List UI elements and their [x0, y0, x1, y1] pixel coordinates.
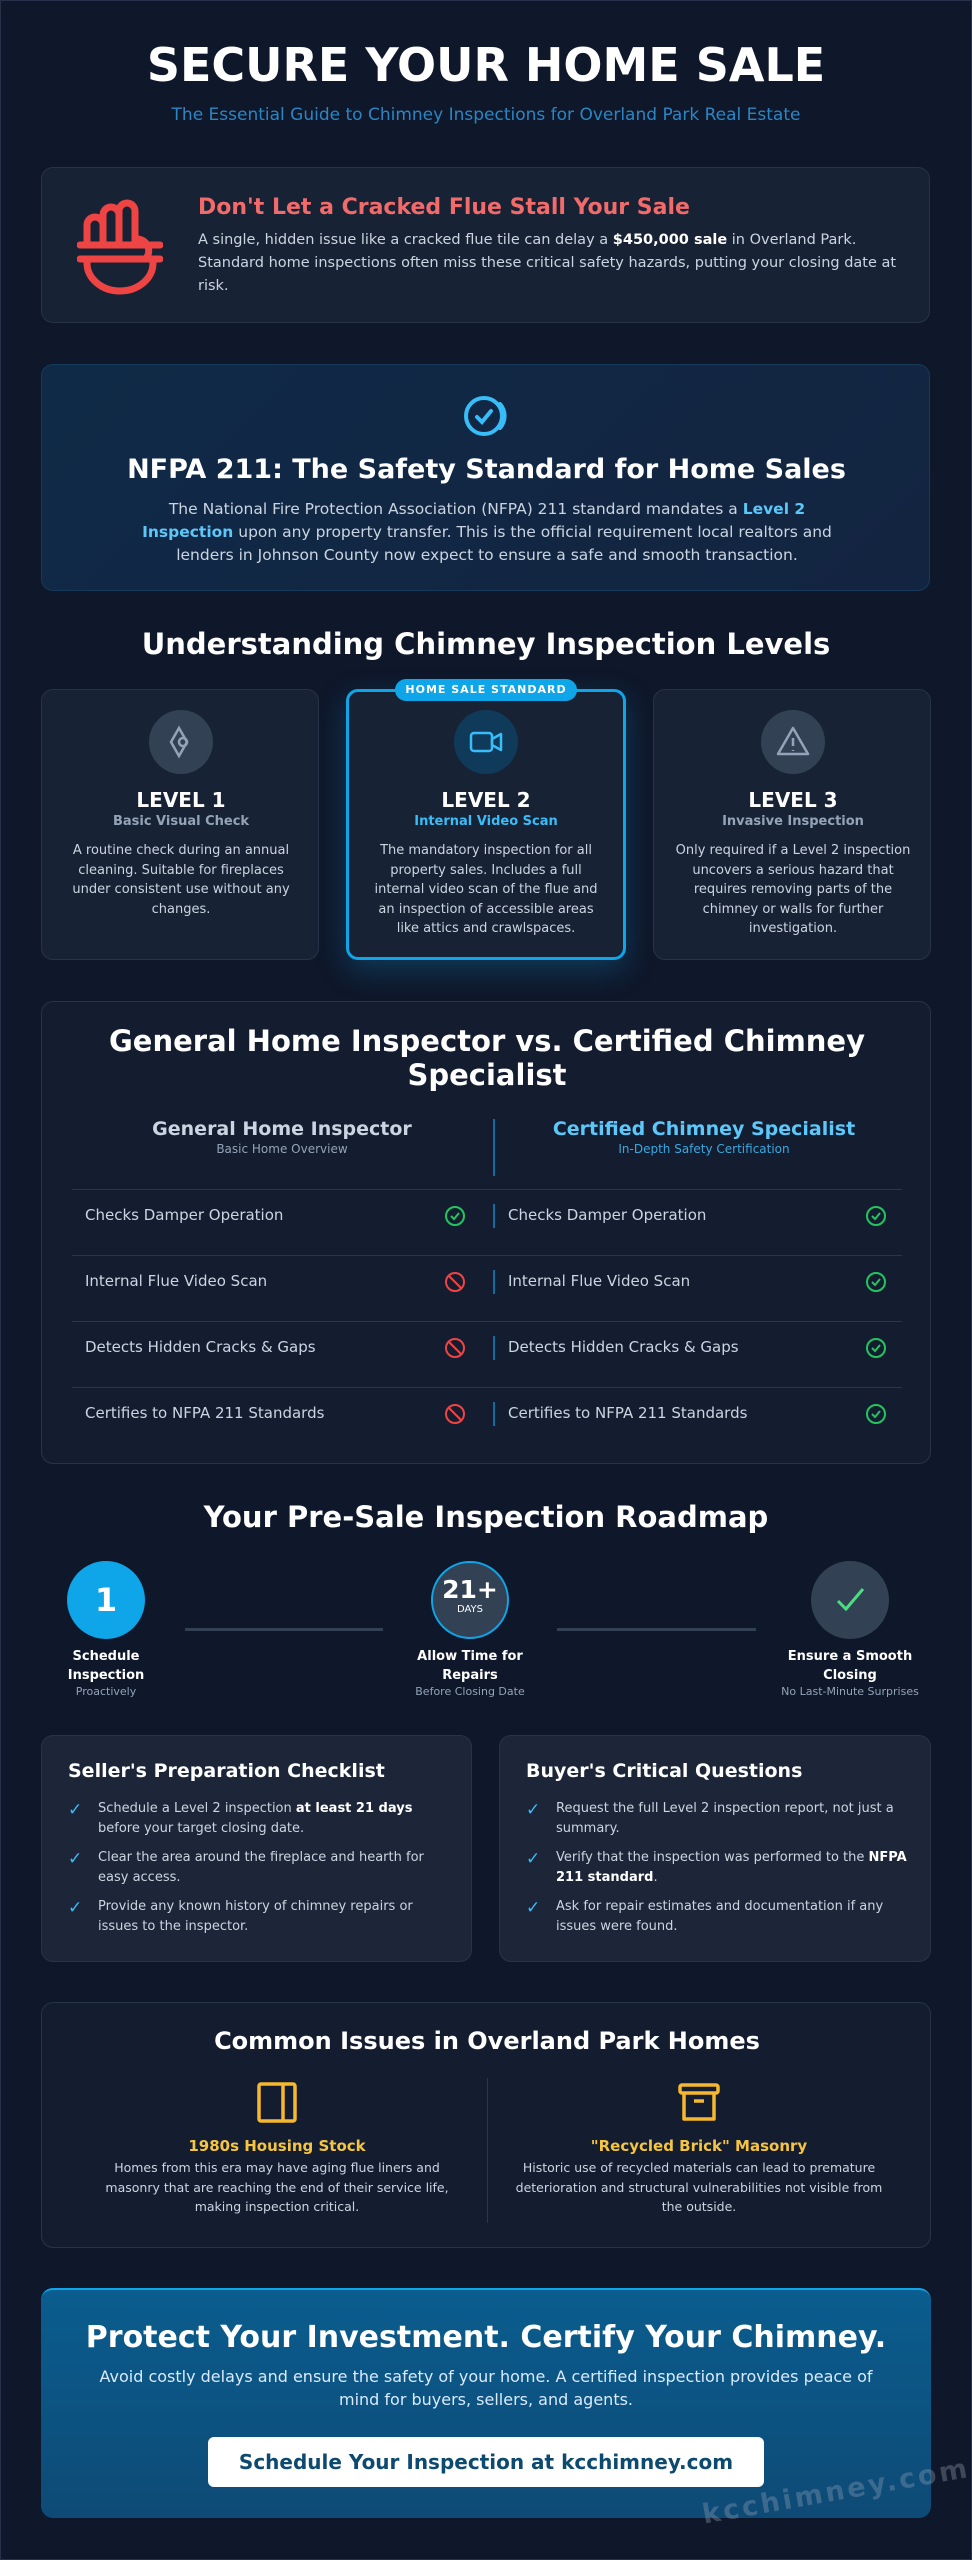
comparison rows: Internal Flue Video Scan — [508, 1272, 690, 1290]
text: The mandatory inspection for all property sales. Includes a full internal video scan of the flue and an inspection of accessible areas like attics and crawlspaces. — [374, 843, 598, 936]
icon: warning — [761, 710, 825, 774]
watermark: kcchimney.com — [700, 2453, 972, 2531]
issue: 1980s housing: 1980s Housing Stock — [188, 2137, 366, 2155]
question items: ✓ — [526, 1800, 540, 1820]
body text: Avoid costly delays and ensure the safety of your home. A certified inspection provides peace of mind for buyers, sellers, and agents. — [99, 2367, 873, 2409]
question items: Request the full Level 2 inspection report, not just a summary. — [556, 1801, 894, 1836]
column header: general — [152, 1118, 412, 1156]
text — [72, 788, 290, 916]
text: Only required if a Level 2 inspection uncovers a serious hazard that requires removing parts of the chimney or walls for further investigation. — [676, 843, 910, 936]
text: LEVEL 3 — [748, 788, 838, 812]
roadmap step 1: Proactively — [76, 1685, 136, 1698]
text: Internal Video Scan — [414, 814, 558, 829]
heading: Protect Your Investment. Certify Your Chimney. — [86, 2320, 886, 2355]
roadmap connectors — [185, 1628, 756, 1631]
column header: specialist: Certified Chimney Specialist — [553, 1118, 855, 1140]
roadmap step 3: Closing — [823, 1668, 877, 1683]
icon: certified check — [464, 396, 507, 436]
roadmap step 3: No Last-Minute Surprises — [781, 1685, 919, 1698]
checklist items: Clear the area around the fireplace and hearth for easy access. — [98, 1850, 424, 1884]
icon: red fist hazard — [77, 200, 163, 294]
text: Invasive Inspection — [722, 814, 864, 829]
text — [676, 788, 910, 936]
comparison rows: Detects Hidden Cracks & Gaps — [85, 1338, 316, 1356]
roadmap step 2: Allow Time for — [417, 1649, 523, 1664]
text: LEVEL 1 — [136, 788, 226, 812]
column header: specialist — [553, 1118, 855, 1156]
icon: book — [257, 2082, 297, 2123]
checklist items: ✓ — [68, 1800, 82, 1820]
panel: call to action — [41, 2288, 931, 2518]
panel: common issues — [41, 2002, 931, 2248]
issue: 1980s housing: Homes from this era may have aging flue liners and masonry that are reaching the end of their service life, making inspection critical. — [105, 2160, 449, 2214]
button: Schedule Your Inspection at kcchimney.com — [239, 2450, 733, 2474]
subtitle: The Essential Guide to Chimney Inspections for Overland Park Real Estate — [172, 105, 800, 125]
roadmap step 2: 21+ — [442, 1575, 498, 1604]
heading: Common Issues in Overland Park Homes — [214, 2027, 760, 2055]
comparison rows — [72, 1189, 902, 1426]
icon: video camera — [454, 710, 518, 774]
button — [208, 2437, 764, 2487]
roadmap step 1 — [67, 1561, 145, 1698]
column header: specialist: In-Depth Safety Certification — [618, 1142, 790, 1156]
text: A routine check during an annual cleaning. Suitable for fireplaces under consistent use without any changes. — [72, 843, 290, 916]
checklist items: Provide any known history of chimney repairs or issues to the inspector. — [98, 1899, 413, 1934]
comparison rows: Checks Damper Operation — [508, 1206, 706, 1224]
text: Basic Visual Check — [113, 814, 249, 829]
question items — [526, 1800, 907, 1934]
heading: Seller's Preparation Checklist — [68, 1760, 385, 1782]
checklist items: Schedule a Level 2 inspection at least 21 days before your target closing date. — [98, 1801, 412, 1836]
panel: NFPA 211 — [41, 364, 930, 591]
panel: level 3 — [653, 689, 931, 960]
issue: recycled brick — [516, 2083, 882, 2214]
heading: Buyer's Critical Questions — [526, 1760, 802, 1782]
heading: Don't Let a Cracked Flue Stall Your Sale — [198, 195, 690, 220]
text — [374, 788, 598, 936]
panel: comparison — [41, 1001, 931, 1464]
comparison rows: Checks Damper Operation — [85, 1206, 283, 1224]
roadmap step 1: Schedule — [72, 1649, 139, 1664]
badge — [395, 679, 577, 701]
column header: general: Basic Home Overview — [216, 1142, 348, 1156]
roadmap step 3 — [781, 1561, 919, 1698]
roadmap step 1: Inspection — [68, 1668, 144, 1683]
question items: ✓ — [526, 1849, 540, 1869]
issue: recycled brick: Historic use of recycled materials can lead to premature deterioration and structural vulnerabilities not visible from the outside. — [516, 2160, 882, 2214]
roadmap step 2: DAYS — [457, 1604, 483, 1615]
comparison rows: Internal Flue Video Scan — [85, 1272, 267, 1290]
issue: recycled brick: "Recycled Brick" Masonry — [591, 2137, 807, 2155]
comparison rows: Certifies to NFPA 211 Standards — [508, 1404, 747, 1422]
comparison rows: Detects Hidden Cracks & Gaps — [508, 1338, 739, 1356]
roadmap step 3: Ensure a Smooth — [788, 1649, 912, 1664]
question items: Ask for repair estimates and documentation if any issues were found. — [556, 1899, 883, 1934]
question items: Verify that the inspection was performed to the NFPA 211 standard. — [556, 1850, 907, 1884]
panel: seller checklist — [41, 1735, 472, 1962]
checklist items: ✓ — [68, 1849, 82, 1869]
issue: 1980s housing — [105, 2082, 449, 2214]
roadmap step 1: 1 — [95, 1581, 117, 1619]
checklist items — [68, 1800, 424, 1934]
panel: level 2 — [346, 689, 626, 960]
badge: HOME SALE STANDARD — [405, 683, 567, 696]
icon: archive box — [678, 2083, 720, 2121]
body text: The National Fire Protection Association (NFPA) 211 standard mandates a Level 2 Inspection upon any property transfer. This is the official requirement local realtors and lenders in Johnson County now expect to ensure a safe and smooth transaction. — [142, 500, 832, 564]
checklist items: ✓ — [68, 1898, 82, 1918]
icon: flame — [149, 710, 213, 774]
roadmap step 2: Repairs — [442, 1668, 498, 1683]
column header: general: General Home Inspector — [152, 1118, 412, 1140]
panel: buyer questions — [499, 1735, 931, 1962]
panel: level 1 — [41, 689, 319, 960]
body text: A single, hidden issue like a cracked flue tile can delay a $450,000 sale in Overland Park. Standard home inspections often miss these critical safety hazards, putting your closing date at risk. — [198, 232, 896, 294]
comparison rows: Certifies to NFPA 211 Standards — [85, 1404, 324, 1422]
heading: NFPA 211: The Safety Standard for Home Sales — [127, 454, 846, 485]
text: LEVEL 2 — [441, 788, 531, 812]
question items: ✓ — [526, 1898, 540, 1918]
heading: General Home Inspector vs. Certified Chimney Specialist — [109, 1024, 865, 1092]
roadmap step 2 — [415, 1561, 525, 1698]
roadmap step 2: Before Closing Date — [415, 1685, 525, 1698]
heading: inspection levels: Understanding Chimney Inspection Levels — [142, 627, 830, 661]
title: SECURE YOUR HOME SALE — [147, 38, 825, 92]
heading: roadmap: Your Pre-Sale Inspection Roadmap — [204, 1500, 768, 1534]
panel: cracked flue alert — [41, 167, 930, 323]
